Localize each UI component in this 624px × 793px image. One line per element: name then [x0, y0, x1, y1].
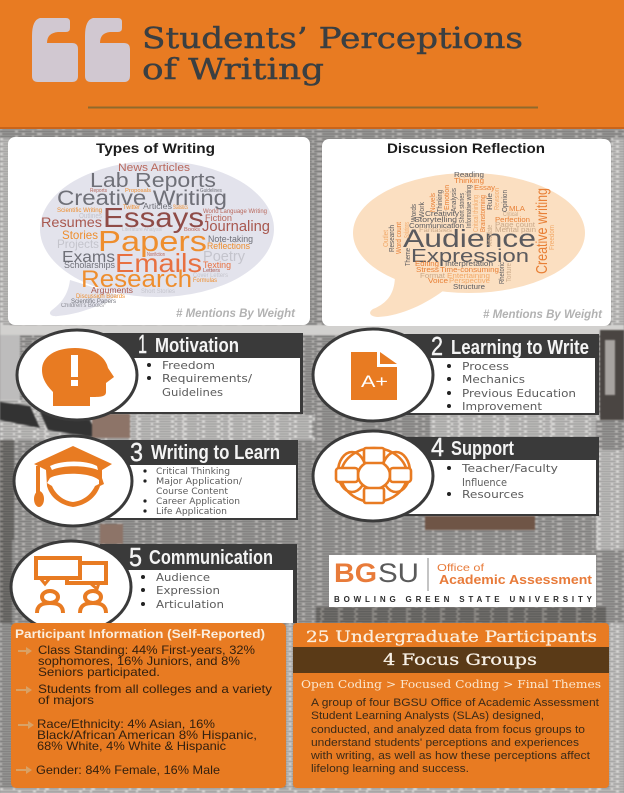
list: support: Teacher/Faculty [461, 462, 559, 475]
word cloud: Time-consuming [440, 265, 499, 274]
word cloud: Creative Writing [57, 187, 227, 210]
list: support: Influence [462, 476, 507, 489]
list: motivation [147, 359, 252, 399]
word cloud: Letters [203, 268, 220, 274]
banner: focus groups [293, 647, 609, 673]
word cloud: Revision [494, 188, 501, 210]
panel: 5 communication [11, 541, 297, 633]
list: learning to write [447, 360, 576, 413]
list: communication [141, 571, 224, 611]
header band [0, 0, 624, 129]
word cloud: Creativity [425, 211, 460, 218]
word cloud: Emotion [444, 185, 451, 210]
panel: 4 support [313, 431, 599, 521]
word cloud: Critical thinking [473, 195, 480, 232]
title: Students’ Perceptions [142, 21, 523, 55]
text: participant details: 68% White, 4% White & Hispanic [37, 739, 226, 753]
panel: 1 motivation [17, 329, 303, 420]
word cloud: Children's Books [61, 303, 104, 309]
word cloud: Opinion [502, 190, 509, 212]
word cloud: Words [411, 204, 418, 222]
heading: communication [129, 542, 273, 572]
heading: discussion reflection: Discussion Reflection [387, 140, 545, 156]
list: writing to learn: Critical Thinking [156, 467, 230, 477]
word cloud: Thinking [437, 190, 444, 212]
list: learning to write: Process [462, 360, 509, 373]
text: study description: conducted, and analyzed data from focus groups to [311, 724, 585, 736]
word cloud: Articulate [487, 225, 494, 246]
heading: support: Support [451, 438, 514, 460]
word cloud: Twitter [123, 204, 141, 211]
heading: support [431, 432, 514, 462]
heading: learning to write: Learning to Write [451, 337, 589, 359]
list: communication: Audience [156, 571, 210, 584]
list: learning to write: Mechanics [462, 373, 525, 386]
word cloud: Note-taking [208, 234, 253, 245]
panel: types of writing word cloud [8, 137, 310, 325]
word cloud: Perfection [495, 215, 530, 224]
text: participant details: Gender: 84% Female, 16% Male [36, 763, 220, 777]
word cloud: Essay [474, 183, 495, 192]
heading: motivation: 1 [138, 329, 147, 359]
word cloud: Research [389, 225, 396, 252]
heading: motivation: Motivation [155, 335, 239, 357]
list: motivation: Requirements/ [162, 372, 252, 385]
word cloud [383, 170, 556, 291]
icon: head with exclamation mark [42, 348, 114, 406]
heading: learning to write [431, 331, 589, 361]
heading: support: 4 [431, 432, 444, 462]
word cloud: Journaling [202, 219, 270, 235]
word cloud: World Language Writing [203, 209, 267, 215]
word cloud: Nonfiction [147, 252, 165, 258]
title: of Writing [142, 52, 324, 86]
logo: BGSU office of academic assessment [329, 555, 596, 607]
icon: graded paper: A+ [361, 372, 388, 391]
heading: communication: 5 [129, 542, 142, 572]
panel: participant information [11, 623, 286, 788]
word cloud: Projects [57, 237, 99, 251]
word cloud: Fiction [205, 213, 232, 224]
word cloud: Page count [495, 220, 536, 229]
list: writing to learn: Course Content [156, 487, 228, 497]
logo: BGSU office of academic assessment: Academic Assessment [439, 572, 593, 587]
panel: study method [293, 623, 609, 788]
word cloud: Stories [62, 228, 98, 242]
word cloud: Short Stories [141, 288, 176, 295]
word cloud: Novels [430, 193, 437, 212]
word cloud: Storytelling [414, 217, 457, 224]
word cloud: Rhetoric [499, 262, 506, 284]
text: study description: A group of four BGSU Office of Academic Assessment [311, 697, 599, 709]
word cloud: News Articles [118, 162, 191, 174]
text: study description: Student Learning Analysts (SLAs) designed, [311, 710, 544, 722]
panel: discussion reflection word cloud [322, 139, 611, 326]
heading: writing to learn [130, 437, 280, 467]
list: writing to learn: Life Application [156, 507, 227, 517]
word cloud: Brainstorming [480, 195, 487, 232]
word cloud: Analysis [451, 188, 458, 212]
word cloud: Editing [415, 259, 439, 268]
list: support: Resources [462, 488, 524, 501]
list: motivation: Freedom [162, 359, 215, 372]
word cloud: Outlines [79, 213, 102, 220]
speech bubble [353, 173, 585, 317]
text: study description: lifelong learning and success. [311, 763, 469, 775]
list: communication: Expression [156, 584, 220, 597]
heading: types of writing: Types of Writing [96, 140, 215, 156]
text: participant details [36, 643, 272, 777]
word cloud: Poetry [203, 248, 245, 265]
word cloud: Reports [90, 188, 107, 194]
word cloud: Scholarships [64, 260, 115, 270]
word cloud: Word count [396, 222, 403, 254]
text: participant details: Black/African American 8% Hispanic, [37, 728, 257, 742]
text: participant details: of majors [38, 693, 94, 707]
list: writing to learn [143, 467, 243, 517]
word cloud: Texting [203, 260, 231, 270]
heading: writing to learn: Writing to Learn [151, 442, 280, 464]
word cloud: Solutions [404, 222, 411, 238]
icon: graded paper [351, 352, 397, 400]
word cloud: Discussion Boards [76, 293, 126, 300]
text: participant details: Race/Ethnicity: 4% Asian, 16% [37, 717, 215, 731]
word cloud: Lab Reports [90, 170, 216, 192]
word cloud: Fantasies [419, 227, 453, 234]
word cloud: Format [420, 271, 446, 280]
icon: graduation cap [34, 446, 112, 507]
heading: motivation [138, 329, 239, 359]
word cloud: Exams [62, 249, 115, 266]
text: participant details: sophomores, 16% Juniors, and 8% [38, 654, 240, 668]
word cloud: Work [419, 202, 426, 218]
text: participant details: Students from all colleges and a variety [38, 682, 272, 696]
caption: mentions by weight: # Mentions By Weight [483, 309, 603, 321]
word cloud: Creative writing [534, 188, 551, 274]
title [142, 21, 523, 86]
word cloud: Papers [98, 226, 207, 258]
logo: BGSU office of academic assessment: BOWLING GREEN STATE UNIVERSITY [334, 595, 593, 604]
word cloud: Mental pain [495, 225, 536, 234]
word cloud: Torture [506, 263, 513, 282]
word cloud: Thinking [454, 176, 484, 185]
logo: BGSU office of academic assessment: SU [378, 558, 419, 588]
speech bubble [40, 161, 274, 316]
word cloud: Voice [428, 276, 448, 285]
list: writing to learn: Career Application [156, 497, 240, 507]
list: support [447, 462, 559, 501]
word cloud: Proposals [125, 188, 151, 194]
logo: BGSU office of academic assessment: Office of [437, 563, 484, 574]
word cloud: Outlet [383, 230, 390, 247]
word cloud: Informative writing [466, 185, 473, 228]
list: learning to write: Improvement [462, 400, 543, 413]
word cloud: Rule [487, 193, 494, 210]
word cloud: Perspective [449, 276, 490, 285]
list: learning to write: Previous Education [462, 387, 576, 400]
list: motivation: Guidelines [162, 386, 223, 399]
word cloud: Resumes [41, 214, 102, 230]
text: participant details: Seniors participated. [38, 665, 160, 679]
word cloud: Entertaining [447, 271, 490, 280]
word cloud: MLA [509, 204, 525, 213]
word cloud: Scientific Papers [71, 299, 116, 305]
list: communication: Articulation [156, 598, 224, 611]
word cloud [41, 162, 270, 309]
word cloud: Formulas [193, 278, 217, 284]
logo: BGSU office of academic assessment: BG [334, 558, 377, 588]
text: study description: understand students' perceptions and experiences [311, 737, 580, 749]
word cloud: Freedom [549, 225, 556, 250]
word cloud: Reading [454, 170, 484, 179]
text: participant details: Class Standing: 44% First-years, 32% [38, 643, 255, 657]
icon: life preserver [336, 448, 411, 503]
text: study description: with writing, as well as how these perceptions affect [310, 750, 590, 762]
word cloud: Cover Letters [193, 273, 228, 279]
heading: writing to learn: 3 [130, 437, 143, 467]
word cloud: Books [184, 227, 200, 233]
list: writing to learn: Major Application/ [156, 477, 243, 487]
word cloud: Expression [411, 246, 529, 266]
word cloud: Emails [115, 248, 202, 278]
arrows [16, 647, 34, 774]
word cloud: Literature Analysis [122, 227, 162, 233]
heading: learning to write: 2 [431, 331, 443, 361]
word cloud: Communication [409, 223, 464, 230]
panel: 2 learning to write [313, 329, 599, 421]
word cloud: Structure [453, 282, 485, 291]
word cloud: Guidelines [200, 188, 222, 194]
word cloud: Critical [503, 211, 518, 218]
text: coding steps: Open Coding > Focused Coding > Final Themes [301, 677, 601, 691]
panel: 3 writing to learn [14, 436, 298, 526]
word cloud: Arguments [91, 286, 133, 295]
word cloud: Articles [143, 202, 172, 211]
word cloud: Research [81, 266, 192, 293]
heading: participants: 25 Undergraduate Participants [306, 628, 597, 646]
word cloud: Theme [405, 248, 412, 266]
heading: communication: Communication [149, 547, 273, 569]
text: study description [310, 697, 599, 775]
word cloud: Short stories [459, 193, 466, 223]
word cloud: Interpretation [445, 259, 493, 268]
word cloud: Essays [103, 202, 204, 233]
word cloud: Stress [416, 265, 439, 274]
icon: quotation marks [32, 18, 130, 82]
word cloud: Reflections [207, 241, 250, 252]
word cloud: Audience [403, 225, 536, 253]
icon: two people talking [36, 558, 106, 613]
heading: participant information: Participant Information (Self-Reported) [15, 627, 265, 641]
caption: mentions by weight: # Mentions By Weight [176, 308, 296, 320]
banner: focus groups: 4 Focus Groups [383, 650, 537, 669]
word cloud: Scientific Writing [57, 208, 102, 214]
word cloud: Statistics [173, 205, 188, 211]
